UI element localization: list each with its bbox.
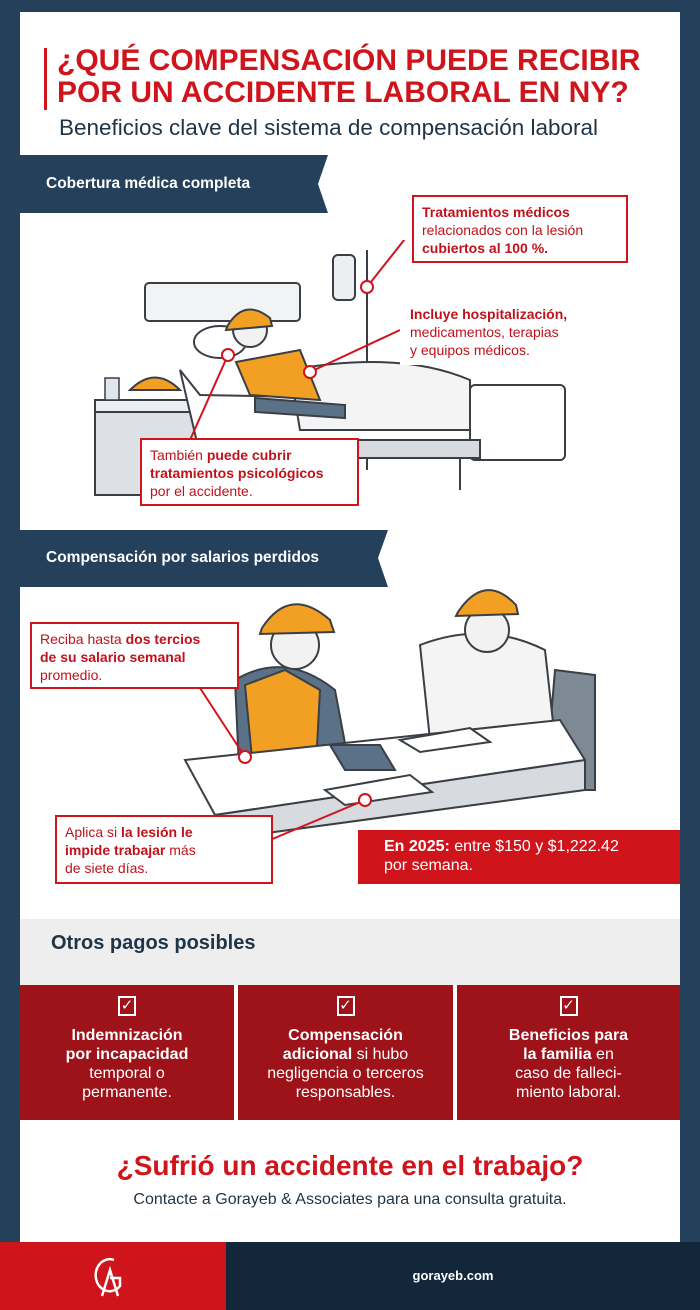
card: beneficios familia: la familia en xyxy=(523,1046,614,1063)
card: beneficios familia: Beneficios para xyxy=(509,1027,628,1044)
callout: tratamientos medicos: relacionados con la lesión xyxy=(422,222,583,238)
callout: hospitalizacion: y equipos médicos. xyxy=(410,342,530,358)
card: beneficios familia: caso de falleci- xyxy=(515,1065,622,1082)
callout: siete dias: Aplica si la lesión le xyxy=(65,824,193,840)
illustration: worker and doctor at desk xyxy=(184,589,596,840)
callout: hospitalizacion xyxy=(400,297,622,365)
card: beneficios familia: miento laboral. xyxy=(516,1084,621,1101)
card: compensacion adicional xyxy=(238,985,453,1120)
card: beneficios familia xyxy=(457,985,680,1120)
banner: salarios perdidos xyxy=(20,530,388,587)
subtitle: Beneficios clave del sistema de compensación laboral xyxy=(59,115,598,140)
card: compensacion adicional: adicional si hubo xyxy=(283,1046,408,1063)
card: indemnizacion: Indemnización xyxy=(71,1027,183,1044)
callout: tratamientos medicos xyxy=(412,195,628,263)
callout: 2025 amounts: por semana. xyxy=(384,857,473,874)
footer right: url xyxy=(226,1242,700,1310)
card: beneficios familia: ✓ xyxy=(562,997,575,1014)
footer left: logo xyxy=(0,1242,226,1310)
callout: hospitalizacion: medicamentos, terapias xyxy=(410,324,559,340)
card: indemnizacion xyxy=(20,985,234,1120)
footer right: url: gorayeb.com xyxy=(413,1268,493,1283)
banner: salarios perdidos: Compensación por salarios perdidos xyxy=(46,549,319,566)
section heading: otros pagos xyxy=(20,919,680,985)
banner: cobertura medica: Cobertura médica completa xyxy=(46,175,250,192)
title: POR UN ACCIDENTE LABORAL EN NY? xyxy=(57,76,629,109)
card: indemnizacion: por incapacidad xyxy=(66,1046,188,1063)
card: indemnizacion: permanente. xyxy=(82,1084,172,1101)
callout: psicologicos: También puede cubrir xyxy=(150,447,292,463)
callout: psicologicos: por el accidente. xyxy=(150,483,253,499)
title accent bar xyxy=(44,48,47,110)
card: compensacion adicional: ✓ xyxy=(339,997,352,1014)
CTA heading: ¿Sufrió un accidente en el trabajo? xyxy=(117,1150,583,1181)
section heading: otros pagos: Otros pagos posibles xyxy=(51,932,255,954)
callout: hospitalizacion: Incluye hospitalización, xyxy=(410,306,567,322)
card: compensacion adicional: negligencia o terceros xyxy=(267,1065,424,1082)
title xyxy=(57,44,640,109)
title: ¿QUÉ COMPENSACIÓN PUEDE RECIBIR xyxy=(57,44,640,77)
callout: dos tercios: promedio. xyxy=(40,667,102,683)
callout: dos tercios: Reciba hasta dos tercios xyxy=(40,631,200,647)
illustration: hospital bed xyxy=(94,240,566,496)
callout: psicologicos xyxy=(140,438,359,506)
callout: siete dias: impide trabajar más xyxy=(65,842,196,858)
callout: tratamientos medicos: Tratamientos médicos xyxy=(422,204,570,220)
CTA text: Contacte a Gorayeb & Associates para una consulta gratuita. xyxy=(133,1191,567,1208)
callout: psicologicos: tratamientos psicológicos xyxy=(150,465,323,481)
card: indemnizacion: ✓ xyxy=(121,997,133,1014)
banner: cobertura medica xyxy=(20,155,328,213)
callout: siete dias xyxy=(55,815,273,884)
card: compensacion adicional: responsables. xyxy=(296,1084,395,1101)
title block xyxy=(44,44,640,140)
callout: dos tercios xyxy=(30,622,239,689)
icon: logo xyxy=(94,1258,122,1296)
callout: siete dias: de siete días. xyxy=(65,860,148,876)
callout: 2025 amounts xyxy=(358,830,680,884)
callout: dos tercios: de su salario semanal xyxy=(40,649,186,665)
card: indemnizacion: temporal o xyxy=(89,1065,165,1082)
callout: 2025 amounts: En 2025: entre $150 y $1,222.42 xyxy=(384,838,619,855)
card: compensacion adicional: Compensación xyxy=(288,1027,403,1044)
callout: tratamientos medicos: cubiertos al 100 %. xyxy=(422,240,548,256)
